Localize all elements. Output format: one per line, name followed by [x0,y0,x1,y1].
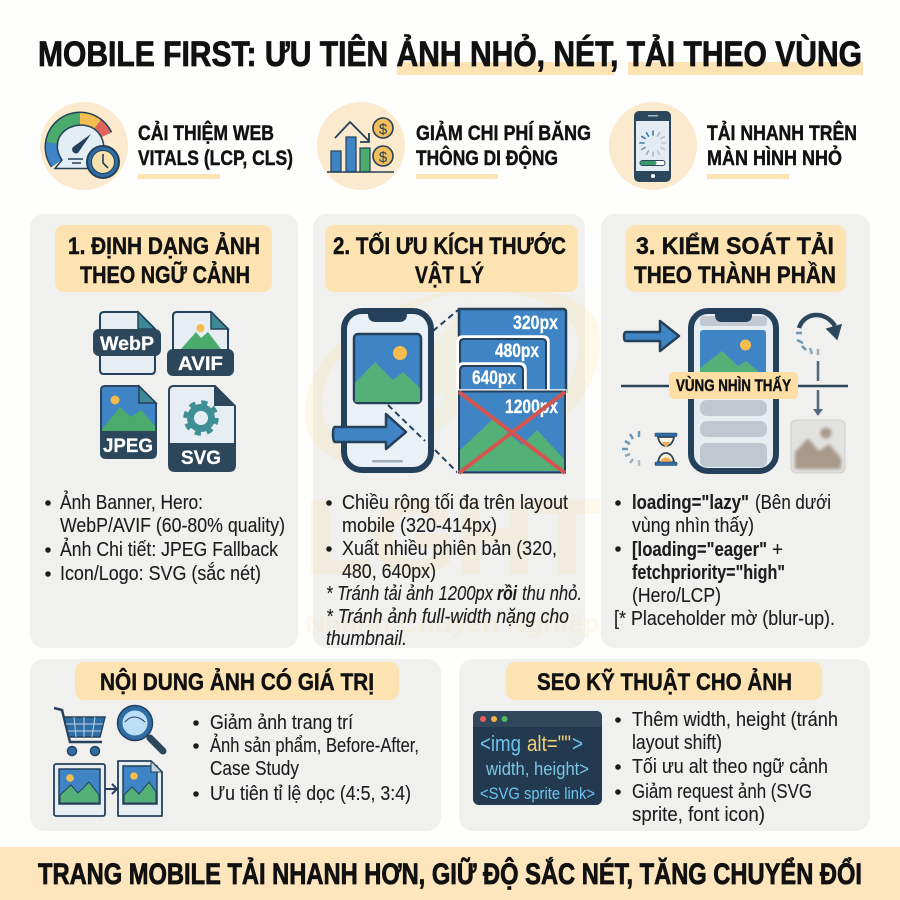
icon: before and after images [54,761,162,816]
heading: technical SEO: SEO KỸ THUẬT CHO ẢNH [537,667,792,696]
text block: SEO bullets: Giảm request ảnh (SVG [632,780,812,803]
icon: WebP file [93,312,161,374]
text block: load bullets: (Bên dưới [755,491,831,514]
icon: curved arrow with spinner [796,315,841,355]
text block: format bullets: Ảnh Banner, Hero: [60,491,203,514]
text block: size bullets [326,491,582,650]
heading: panel 1: 1. ĐỊNH DẠNG ẢNH [68,231,260,260]
image size stack: 480px [495,341,539,362]
icon: blurred placeholder [791,420,845,473]
benefit: bandwidth cost [317,102,591,190]
panel: physical size [313,214,585,648]
heading: panel 3: THEO THÀNH PHẦN [634,261,836,289]
heading: valuable content [75,662,399,700]
arrow: down [813,361,823,416]
text block: SEO bullets: sprite, font icon) [632,803,765,826]
icon: spinner [622,431,639,466]
heading: panel 1: THEO NGỮ CẢNH [80,260,250,289]
watermark logo: Nhanh Chuyên Nghiệp [305,611,600,638]
text block: size bullets: * Tránh tải ảnh 1200px [326,582,494,605]
icon: SVG file [169,385,235,471]
benefit text: VITALS (LCP, CLS) [138,147,293,170]
benefit text [138,121,293,179]
heading: panel 3 [626,225,846,292]
icon: SVG file: SVG [181,448,221,469]
icon: dashed projection lines [388,310,458,473]
text block: SEO bullets: Tối ưu alt theo ngữ cảnh [632,755,828,778]
text block: size bullets: thu nhỏ. [522,582,582,605]
text block: format bullets: Icon/Logo: SVG (sắc nét) [60,562,261,585]
text block: load bullets [614,491,835,630]
benefit text: TẢI NHANH TRÊN [707,121,857,145]
benefit text [707,121,857,179]
code window: alt="" [527,731,571,756]
watermark logo: LGHT [305,479,600,596]
heading: panel 2: 2. TỐI ƯU KÍCH THƯỚC [333,232,566,260]
text block: content bullets: Case Study [210,757,300,780]
text block: size bullets: Chiều rộng tối đa trên layout [342,491,568,514]
illustration: viewport loading [621,309,848,473]
icon: AVIF file [167,312,234,376]
text block: size bullets: rồi [497,582,518,605]
icon: JPEG file: JPEG [103,436,153,457]
icon: shopping cart [54,708,105,756]
icon: phone with viewport [691,309,776,471]
panel: valuable content [30,659,441,831]
benefit text: MÀN HÌNH NHỎ [707,146,842,170]
text block: load bullets: fetchpriority="high" [632,561,785,584]
benefit text: CẢI THIỆM WEB [138,121,274,145]
heading: panel 3: 3. KIỂM SOÁT TẢI [636,231,834,260]
image size stack [458,309,566,473]
icon: phone [344,309,431,470]
label: viewport: VÙNG NHÌN THẤY [676,376,791,395]
text block: load bullets: (Hero/LCP) [632,584,721,607]
text block: load bullets: + [772,538,783,561]
text block: content bullets: Giảm ảnh trang trí [210,711,353,734]
text block: size bullets: 480, 640px) [342,560,436,583]
text block: load bullets: loading="lazy" [632,491,749,514]
text block: format bullets: WebP/AVIF (60-80% quality) [60,514,285,537]
footer banner [0,847,900,900]
heading: panel 2: VẬT LÝ [415,261,484,289]
icon: magnifier [118,706,163,751]
illustration: phone with image sizes [333,309,566,473]
icon: bar chart with coins: $ [379,121,388,138]
icon: WebP file: WebP [100,334,154,355]
heading: panel 1 [55,225,272,292]
icon: file formats [93,312,235,471]
text block: size bullets: Xuất nhiều phiên bản (320, [342,537,557,560]
text block: size bullets: thumbnail. [326,627,407,650]
icon: AVIF file: AVIF [178,354,223,375]
image size stack: 640px [472,368,516,389]
code window [473,711,602,805]
panel: load control [601,214,870,648]
panel: technical SEO [459,659,870,831]
heading: panel 2 [325,225,578,292]
benefit: fast loading [609,102,857,190]
label: viewport [669,372,798,399]
text block: size bullets: * Tránh ảnh full-width nặng cho [326,605,569,628]
code window: <SVG sprite link> [480,784,595,803]
image size stack: 320px [513,313,558,334]
text block: content bullets: Ảnh sản phẩm, Before-After, [210,734,419,757]
text block: format bullets [45,491,285,585]
icon: phone with spinner [634,111,671,182]
benefit text: THÔNG DI ĐỘNG [416,146,558,170]
text block: load bullets: vùng nhìn thấy) [632,514,754,537]
panel: image formats [30,214,298,648]
text block: content bullets: Ưu tiên tỉ lệ dọc (4:5, 3:4) [210,782,411,805]
text block: load bullets: [* Placeholder mờ (blur-up). [614,607,835,630]
text block: SEO bullets: layout shift) [632,731,722,754]
text block: SEO bullets [615,708,838,826]
text block: format bullets: Ảnh Chi tiết: JPEG Fallback [60,538,279,561]
benefit text [416,122,591,179]
icon: speedometer with clock [52,119,119,178]
image size stack: 1200px [505,397,558,418]
icon: bar chart with coins: $ [379,149,388,166]
heading: technical SEO [506,662,822,700]
code window: <img [480,731,521,756]
icon: JPEG file [100,385,157,459]
icon: bar chart with coins [327,118,394,172]
text block: content bullets [193,711,419,805]
benefit: web vitals [40,102,293,190]
icon: hourglass [655,433,677,466]
fold line [621,385,848,387]
arrow [333,414,406,449]
code window: width, height> [485,759,589,779]
text block: size bullets: mobile (320-414px) [342,514,497,537]
benefit text: GIẢM CHI PHÍ BĂNG [416,122,591,145]
text block: load bullets: [loading="eager" [632,538,767,561]
arrow [624,321,679,351]
heading: valuable content: NỘI DUNG ẢNH CÓ GIÁ TRỊ [100,667,374,696]
watermark logo [305,287,600,638]
text block: SEO bullets: Thêm width, height (tránh [632,708,838,731]
code window: > [572,731,583,756]
